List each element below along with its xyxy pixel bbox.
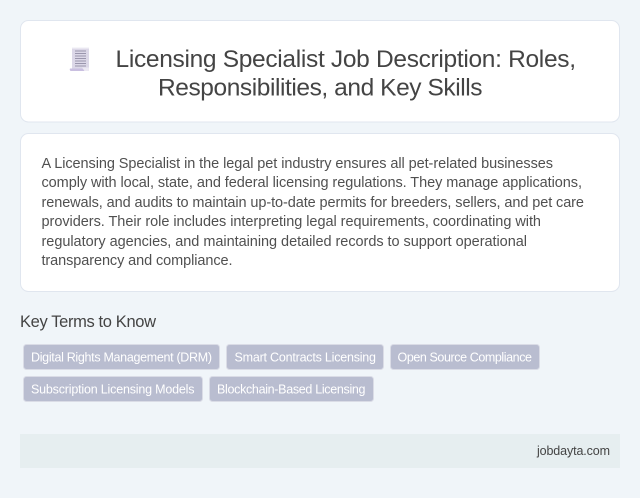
title: Licensing Specialist Job Description: Roles, xyxy=(116,46,576,73)
description text: providers. Their role includes interpreting legal requirements, coordinating with xyxy=(42,214,541,230)
panel: title card xyxy=(20,20,620,122)
chip: subscription licensing models: Subscription Licensing Models xyxy=(31,382,194,396)
chip: subscription licensing models xyxy=(24,376,202,402)
title: Responsibilities, and Key Skills xyxy=(158,74,482,102)
chip: digital rights management xyxy=(24,344,220,370)
chip: blockchain-based licensing xyxy=(210,376,374,402)
panel: description card xyxy=(20,134,620,292)
key term chips xyxy=(24,344,540,402)
description text: comply with local, state, and federal licensing regulations. They manage applications, xyxy=(42,175,582,191)
description text: transparency and compliance. xyxy=(42,253,232,269)
chip: digital rights management: Digital Rights Management (DRM) xyxy=(31,350,212,364)
heading: key terms: Key Terms to Know xyxy=(20,313,156,331)
footer source text: jobdayta.com xyxy=(536,444,610,458)
chip: blockchain-based licensing: Blockchain-Based Licensing xyxy=(217,382,366,396)
title xyxy=(116,46,576,102)
chip: open source compliance xyxy=(390,344,540,370)
description text: A Licensing Specialist in the legal pet industry ensures all pet-related businesses xyxy=(42,156,553,172)
chip: open source compliance: Open Source Compliance xyxy=(398,350,532,364)
icon: paper scroll document xyxy=(70,48,89,71)
description text: regulatory agencies, and maintaining detailed records to support operational xyxy=(42,234,527,250)
chip: smart contracts licensing: Smart Contracts Licensing xyxy=(234,350,376,364)
description text: renewals, and audits to maintain up-to-date permits for breeders, sellers, and pet care xyxy=(42,195,584,211)
description text xyxy=(42,156,584,269)
footer bar xyxy=(20,434,620,468)
chip: smart contracts licensing xyxy=(226,344,384,370)
